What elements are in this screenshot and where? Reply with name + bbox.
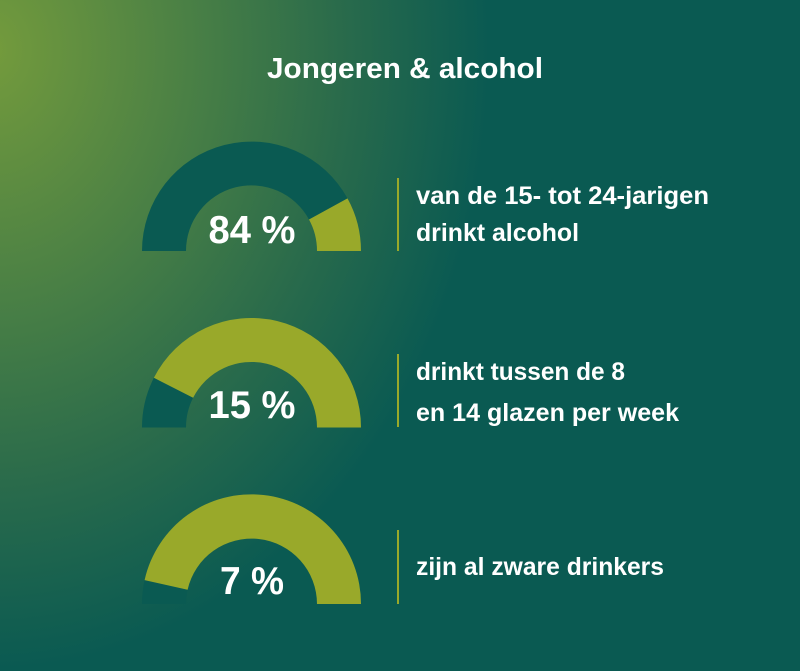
text: first row: van de 15- tot 24-jarigen bbox=[416, 182, 709, 210]
gauge: 15 percent bbox=[142, 318, 361, 428]
gauge: 84 percent: 84 % bbox=[208, 209, 296, 252]
text: third row: zijn al zware drinkers bbox=[416, 553, 664, 581]
divider: second row bbox=[397, 354, 399, 427]
divider: third row bbox=[397, 530, 399, 604]
text: second row bbox=[416, 358, 679, 427]
divider: first row bbox=[397, 178, 399, 251]
gauge: 15 percent: 15 % bbox=[208, 384, 296, 427]
text: first row bbox=[416, 182, 709, 247]
text: first row: drinkt alcohol bbox=[416, 219, 579, 247]
gauge: 7 percent: 7 % bbox=[220, 560, 284, 603]
title: Jongeren & alcohol bbox=[267, 53, 543, 85]
text: second row: en 14 glazen per week bbox=[416, 399, 679, 427]
gauge: 84 percent bbox=[142, 142, 361, 252]
text: second row: drinkt tussen de 8 bbox=[416, 358, 625, 386]
gauge: 7 percent bbox=[142, 494, 361, 604]
